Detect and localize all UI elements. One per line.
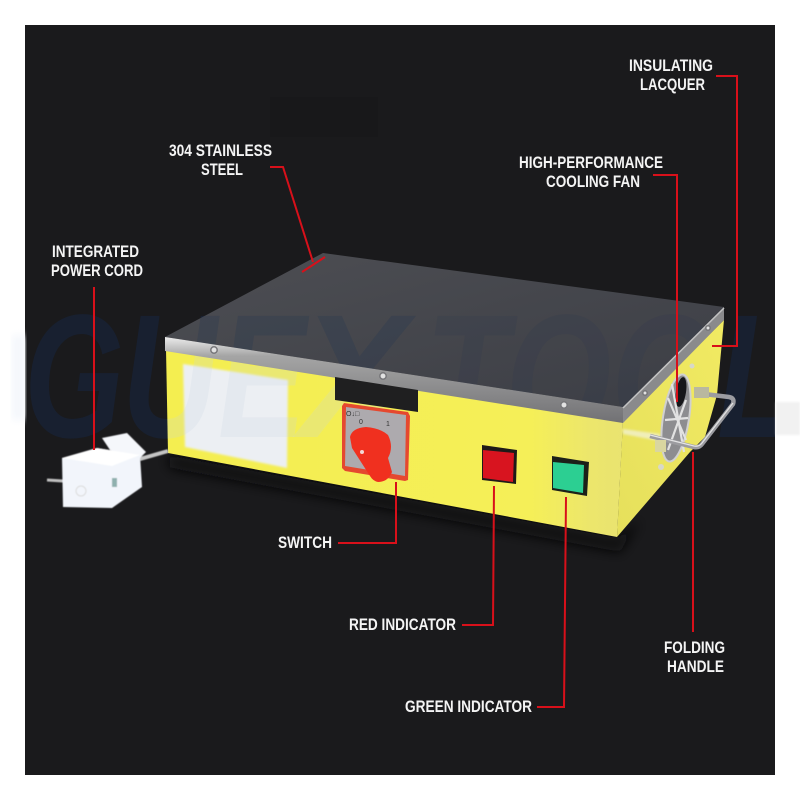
side panel highlight streak [623, 429, 660, 441]
power cord [140, 451, 168, 459]
box side panel [617, 320, 724, 537]
label: red indicator: RED INDICATOR [349, 615, 456, 634]
steel side rim [623, 307, 724, 423]
product: heating box [165, 253, 736, 537]
label: red indicator [349, 486, 494, 634]
plug body [62, 448, 142, 508]
watermark tint over top plate: U [122, 279, 220, 475]
watermark tint over top plate: E [218, 279, 309, 475]
green indicator button [552, 456, 589, 496]
switch frame [342, 403, 410, 481]
box front panel [166, 349, 623, 537]
white label [183, 364, 288, 468]
label: insulating lacquer [629, 56, 737, 346]
watermark tint over top plate [197, 316, 416, 368]
label: folding handle: FOLDING [664, 638, 725, 657]
label: power cord [51, 242, 143, 450]
watermark tint over front panel: E [218, 279, 309, 475]
stainless steel top plate [165, 253, 724, 407]
label: switch: SWITCH [278, 533, 332, 552]
watermark tint over front panel [167, 356, 384, 438]
plug ear [102, 433, 146, 458]
label: folding handle [664, 452, 725, 676]
label: insulating lacquer: LACQUER [640, 75, 705, 94]
watermark tint over front panel: X [292, 279, 417, 475]
watermark text [30, 314, 775, 439]
rotary switch: 0 [359, 419, 363, 426]
watermark text: G [24, 279, 124, 475]
watermark text: E [218, 279, 309, 475]
label: power cord: POWER CORD [51, 261, 143, 280]
watermark tint over front panel: U [122, 279, 220, 475]
watermark text: U [122, 279, 220, 475]
rotary switch [342, 403, 410, 482]
plug pin [47, 480, 63, 481]
black name plate [335, 377, 418, 412]
folding handle [650, 387, 734, 452]
label: cooling fan: COOLING FAN [546, 172, 640, 191]
switch markings: O↓□ [346, 411, 360, 418]
red indicator button [482, 445, 517, 484]
steel front rim [165, 337, 623, 423]
label: cooling fan [519, 153, 677, 402]
rotary switch: 1 [386, 421, 390, 428]
switch knob [350, 427, 392, 482]
label: cooling fan: HIGH-PERFORMANCE [519, 153, 663, 172]
switch face [345, 407, 406, 476]
cooling fan [656, 364, 696, 470]
label: stainless steel: 304 STAINLESS [169, 141, 272, 160]
margin fade of watermark [12, 335, 800, 435]
power plug [47, 433, 168, 508]
label: stainless steel [169, 141, 325, 272]
watermark tint over top plate: X [292, 279, 417, 475]
label: green indicator: GREEN INDICATOR [405, 697, 532, 716]
label: switch [278, 482, 396, 552]
label: green indicator [405, 497, 566, 716]
watermark text: X [292, 279, 417, 475]
label: folding handle: HANDLE [667, 657, 724, 676]
floor shadow [168, 455, 640, 552]
rim screws [211, 326, 710, 408]
label: power cord: INTEGRATED [52, 242, 139, 261]
label: insulating lacquer: INSULATING [629, 56, 713, 75]
faint dark patch [270, 97, 378, 137]
label: stainless steel: STEEL [201, 160, 243, 179]
